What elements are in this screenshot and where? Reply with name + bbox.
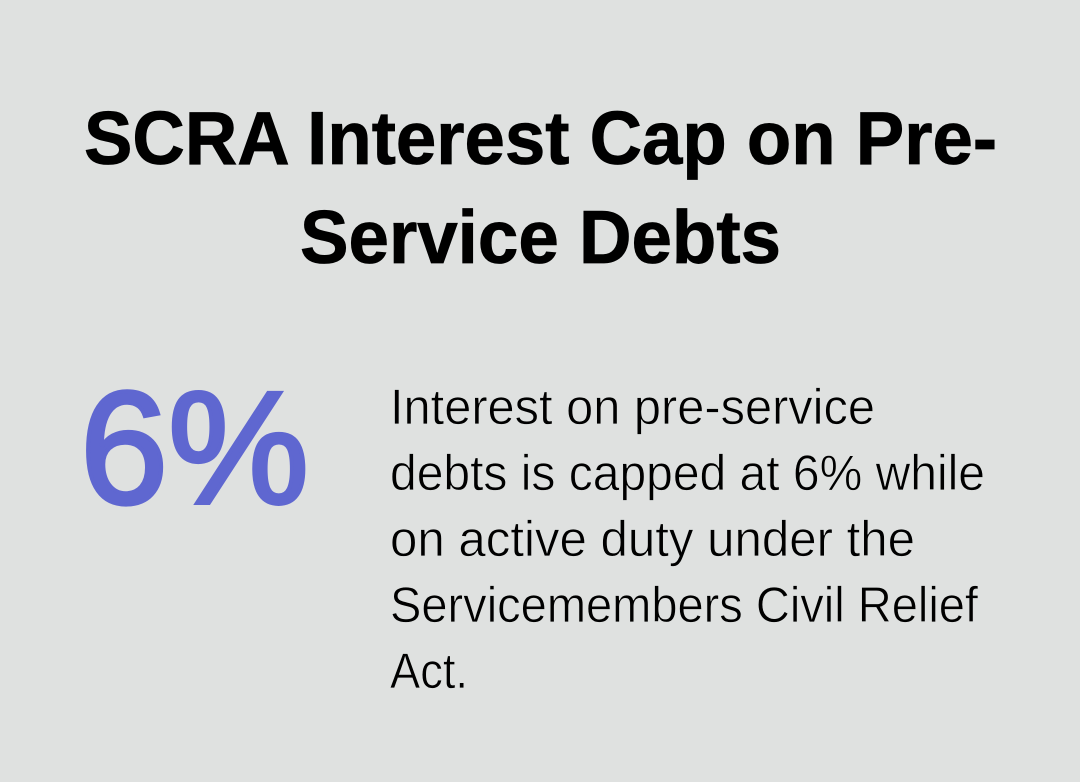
description text: Interest on pre-service bbox=[390, 379, 875, 435]
title: SCRA Interest Cap on Pre- bbox=[84, 96, 997, 180]
description text: on active duty under the bbox=[390, 511, 915, 567]
description text: Servicemembers Civil Relief bbox=[390, 577, 978, 633]
description text: debts is capped at 6% while bbox=[390, 445, 985, 501]
description text: Act. bbox=[390, 643, 468, 699]
title bbox=[84, 96, 997, 279]
title: Service Debts bbox=[300, 195, 781, 279]
description text bbox=[390, 379, 985, 699]
statistic: 6%: 6% bbox=[80, 358, 309, 537]
